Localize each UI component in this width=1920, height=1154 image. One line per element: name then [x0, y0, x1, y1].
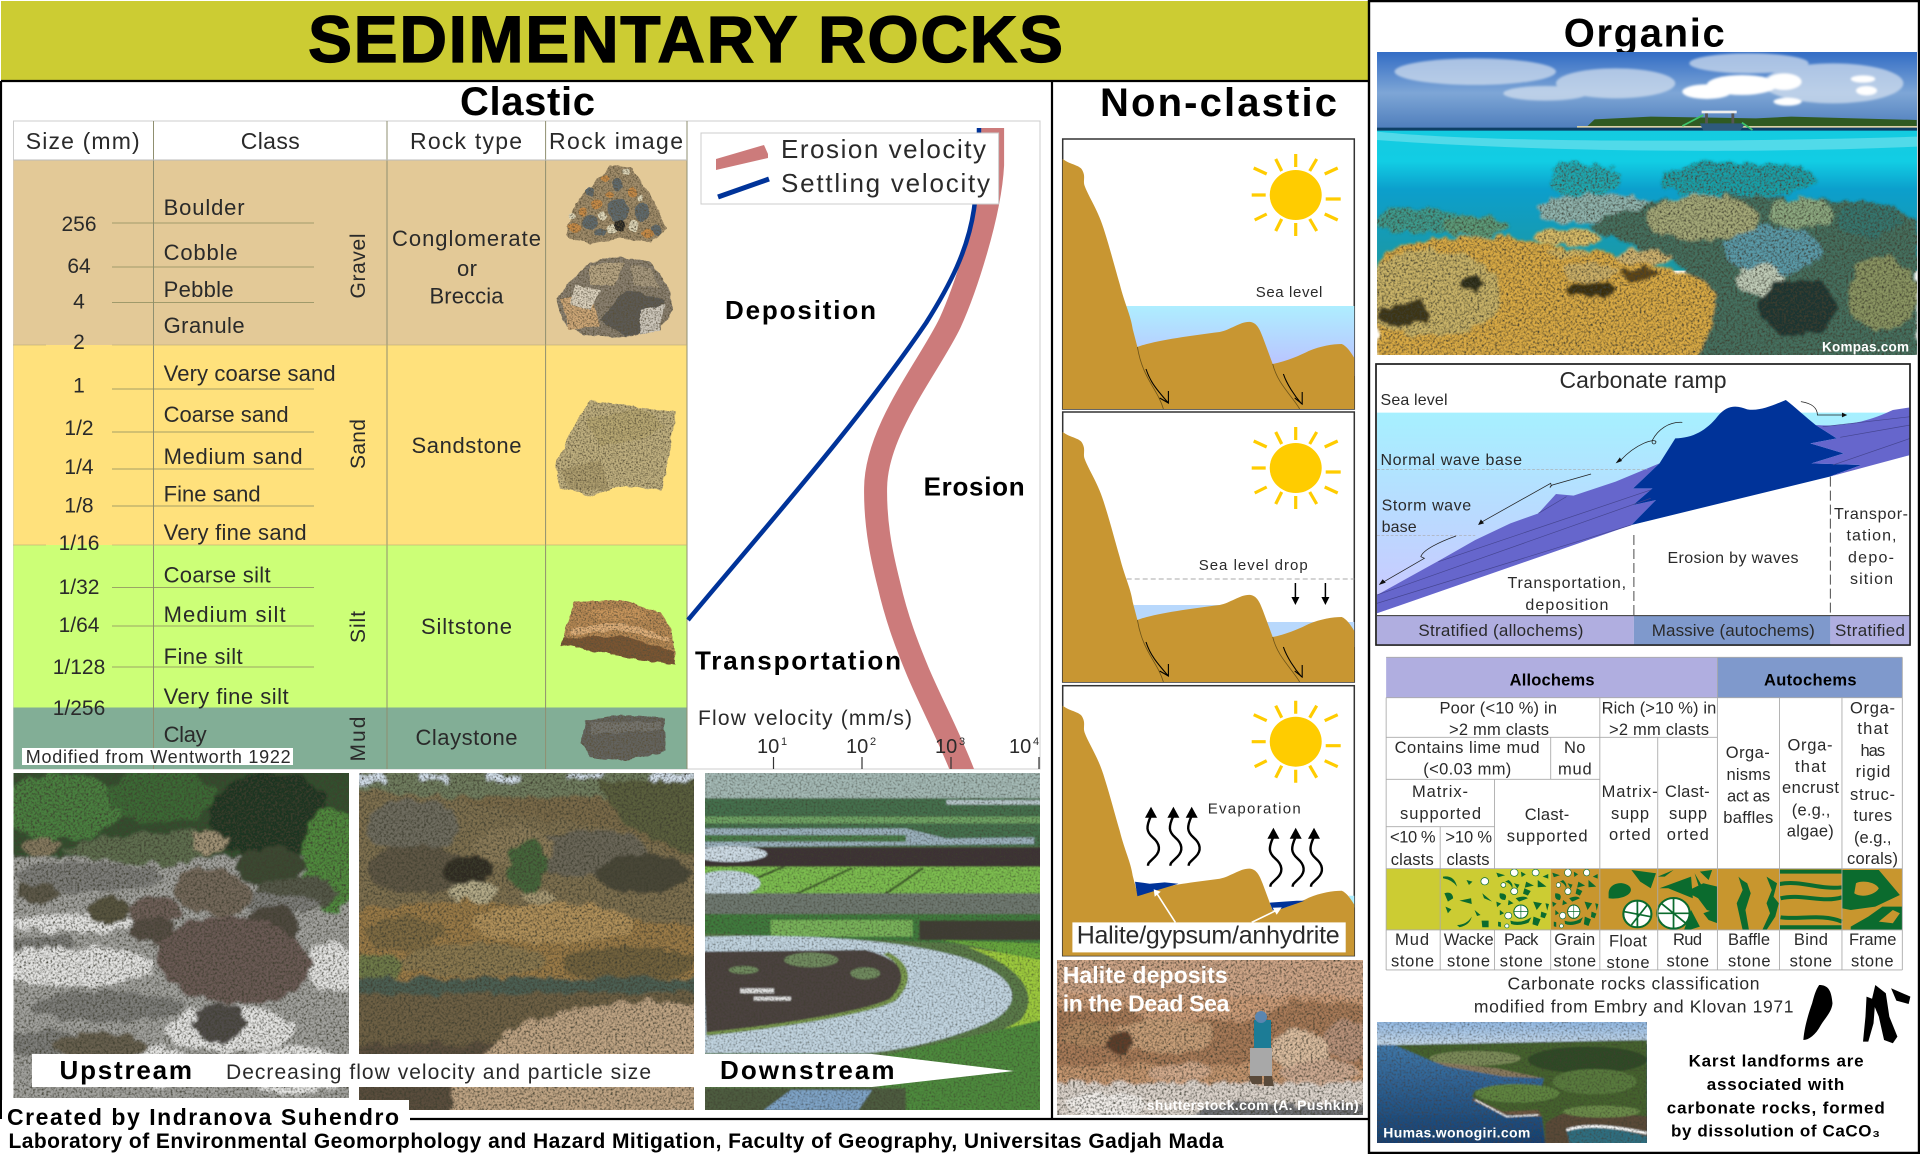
ramp water: [1377, 413, 1910, 613]
rock type labels: or: [457, 256, 477, 281]
rock names: Wacke: [1444, 931, 1494, 949]
ramp labels: Transpor-: [1834, 506, 1908, 523]
photo: karst coast: [1375, 1020, 1649, 1145]
size labels: 4: [73, 290, 85, 314]
table header: Rock type: [410, 128, 522, 154]
rock names: stone: [1851, 953, 1894, 971]
legend: Settling velocity: [781, 168, 990, 198]
class labels: Medium sand: [164, 444, 303, 469]
heading: clastic: Clastic: [460, 80, 595, 124]
grade labels rotated: [347, 234, 370, 762]
photo: coral reef: Kompas.com: [1822, 340, 1909, 355]
diagram: evaporation: [1063, 686, 1354, 956]
diagram: sea level: Sea level: [1256, 284, 1322, 301]
ramp labels: Transportation,: [1508, 575, 1626, 592]
bafflestone organisms: [1737, 877, 1779, 930]
diagram: sea level: [1063, 139, 1354, 409]
velocity axis: 10: [846, 736, 868, 758]
title banner: [1, 1, 1368, 80]
ramp labels: Erosion by waves: [1668, 550, 1798, 567]
process labels: Erosion: [924, 472, 1025, 502]
classification criteria: supported: [1507, 828, 1588, 846]
arrow: upstream to downstream: Downstream: [720, 1055, 894, 1085]
classification criteria: [1390, 699, 1898, 869]
floatstone grains: [1609, 870, 1656, 899]
rock names: stone: [1728, 953, 1770, 971]
classification criteria: Rich (>10 %) in: [1602, 699, 1716, 717]
rock names: stone: [1500, 953, 1543, 971]
rock image: siltstone: [560, 600, 676, 665]
rock names: Float: [1609, 933, 1647, 951]
class labels: Boulder: [164, 195, 245, 220]
class labels: Cobble: [164, 240, 238, 265]
classification criteria: orted: [1609, 826, 1651, 844]
rock type labels: Conglomerate: [392, 226, 541, 251]
ramp labels: depo-: [1848, 550, 1894, 567]
rock type labels: Siltstone: [421, 614, 512, 639]
size labels: 1/32: [59, 576, 99, 599]
rock type labels: Breccia: [430, 284, 504, 308]
velocity axis: 3: [959, 736, 965, 748]
rock names: Bind: [1794, 931, 1828, 949]
photo: dead sea halite: shutterstock.com (A. Pushkin): [1147, 1097, 1359, 1113]
classification criteria: Matrix-: [1602, 783, 1658, 801]
classification criteria: struc-: [1850, 786, 1895, 804]
wackestone grains: [1443, 876, 1492, 927]
size labels: 1/4: [64, 456, 94, 479]
karst note: by dissolution of CaCO₃: [1671, 1122, 1880, 1141]
classification criteria: Poor (<10 %) in: [1440, 699, 1557, 717]
velocity axis: 10: [935, 736, 957, 758]
ramp labels: Carbonate ramp: [1560, 367, 1726, 393]
karst note: carbonate rocks, formed: [1667, 1098, 1885, 1117]
table header: Size (mm): [26, 128, 140, 154]
size labels: 2: [73, 331, 85, 354]
rock image: conglomerate: [566, 165, 667, 244]
ramp labels: Normal wave base: [1380, 452, 1522, 469]
karst note: [1667, 1052, 1885, 1141]
size labels: 1: [73, 374, 85, 398]
rock type labels: Sandstone: [412, 433, 522, 458]
classification criteria: supp: [1611, 805, 1649, 823]
credits: [2, 1100, 1224, 1153]
caption: halite deposits: Halite deposits: [1063, 962, 1228, 988]
classification criteria: >10 %: [1445, 829, 1492, 847]
classification criteria: Orga-: [1850, 699, 1895, 717]
classification headers: Autochems: [1764, 672, 1857, 690]
arrow: upstream to downstream: Decreasing flow velocity and particle size: [226, 1061, 651, 1084]
grade labels rotated: Mud: [347, 716, 370, 762]
table header: Rock image: [549, 128, 683, 154]
heading: organic: Organic: [1564, 12, 1725, 56]
classification criteria: >2 mm clasts: [1609, 721, 1709, 739]
classification criteria: Clast-: [1525, 806, 1569, 824]
classification headers: [1510, 672, 1857, 690]
velocity axis: 4: [1033, 736, 1039, 748]
panel: clastic: [0, 80, 1048, 1113]
size labels: 256: [61, 213, 97, 236]
classification criteria: corals): [1847, 850, 1898, 868]
classification criteria: Contains lime mud: [1395, 739, 1540, 757]
grade labels rotated: Gravel: [347, 234, 370, 298]
ramp labels: Stratified: [1835, 621, 1905, 640]
photo: dead sea halite: [1057, 960, 1363, 1115]
credits: Created by Indranova Suhendro: [7, 1104, 399, 1130]
velocity axis: 10: [757, 736, 779, 758]
velocity axis: Flow velocity (mm/s): [698, 707, 912, 730]
legend: Erosion velocity: [781, 134, 986, 164]
table header bands: [1386, 657, 1717, 698]
classification criteria: that: [1857, 720, 1889, 738]
rock names: Grain: [1554, 931, 1595, 949]
size labels: 1/256: [53, 697, 105, 720]
classification criteria: rigid: [1856, 763, 1890, 781]
rock names: stone: [1666, 953, 1709, 971]
class labels: Fine silt: [164, 644, 243, 669]
class labels: Granule: [164, 313, 245, 338]
velocity axis: [698, 707, 1039, 769]
classification criteria: tures: [1854, 807, 1892, 825]
classification criteria: supp: [1669, 805, 1707, 823]
class labels: Clay: [164, 722, 207, 747]
classification criteria: (e.g.,: [1854, 829, 1892, 847]
source note: Modified from Wentworth 1922: [26, 747, 291, 767]
photo: downstream meander: [693, 770, 1048, 1113]
rock names: stone: [1790, 953, 1832, 971]
rock names: [1391, 931, 1896, 972]
bindstone organisms: [1780, 872, 1842, 927]
classification caption: modified from Embry and Klovan 1971: [1474, 997, 1794, 1017]
classification criteria: clasts: [1446, 851, 1490, 869]
photo: karst coast: Humas.wonogiri.com: [1383, 1124, 1530, 1140]
class labels: Fine sand: [164, 482, 261, 506]
rock image: claystone: [581, 715, 666, 761]
ramp labels: base: [1382, 519, 1417, 536]
erosion velocity curve: [876, 128, 993, 775]
ramp labels: Sea level: [1380, 392, 1448, 409]
arrow: upstream to downstream: Upstream: [60, 1055, 192, 1085]
panel: organic: [1359, 12, 1917, 1145]
size labels: 64: [67, 255, 91, 278]
ramp labels: Storm wave: [1382, 498, 1471, 515]
panel: non-clastic: [1050, 81, 1375, 1120]
settling velocity curve: [688, 128, 979, 620]
title banner: SEDIMENTARY ROCKS: [308, 2, 1063, 76]
class labels: Pebble: [164, 277, 234, 302]
classification criteria: clasts: [1391, 851, 1434, 869]
class labels: Coarse sand: [164, 402, 289, 427]
size labels: 1/64: [59, 614, 100, 637]
classification criteria: act as: [1727, 788, 1770, 806]
credits: Laboratory of Environmental Geomorphology and Hazard Mitigation, Faculty of Geography, Universitas Gadjah Mada: [8, 1130, 1224, 1153]
class labels: Coarse silt: [164, 562, 271, 588]
ramp labels: sition: [1850, 571, 1893, 588]
class labels: Very fine silt: [164, 684, 289, 709]
rock names: Frame: [1849, 931, 1896, 949]
class labels: [164, 195, 336, 747]
facies bar: [1377, 616, 1634, 645]
ramp labels: Stratified (allochems): [1418, 621, 1583, 640]
rudstone grains: [1658, 870, 1717, 930]
velocity axis: 1: [781, 736, 787, 748]
process labels: Deposition: [725, 295, 876, 325]
grade labels rotated: Sand: [347, 419, 370, 469]
stratified allochem wedge: [1377, 463, 1659, 613]
caption: halite deposits: [1064, 966, 1230, 1012]
classification criteria: Clast-: [1665, 783, 1710, 801]
diagram: carbonate ramp: [1376, 364, 1910, 645]
table header: Class: [241, 128, 300, 154]
size labels: 1/8: [64, 494, 94, 518]
classification criteria: supported: [1400, 805, 1481, 823]
classification criteria: (e.g.,: [1792, 802, 1830, 820]
size labels: 1/2: [64, 417, 94, 440]
classification criteria: encrust: [1782, 779, 1839, 797]
stratified right wedge: [1810, 407, 1910, 477]
rock names: Baffle: [1728, 931, 1770, 949]
classification headers: Allochems: [1510, 672, 1595, 690]
rock type labels: Claystone: [416, 725, 518, 750]
rock names: Pack: [1504, 931, 1539, 949]
rock image: breccia: [556, 256, 673, 338]
photo: midstream outcrop: [352, 767, 710, 1113]
classification criteria: mud: [1558, 761, 1592, 779]
rock names: Rud: [1673, 931, 1702, 949]
rock names: stone: [1606, 954, 1650, 972]
boat: [1682, 111, 1752, 131]
legend: [701, 133, 999, 204]
classification criteria: Orga-: [1726, 744, 1770, 762]
classification criteria: orted: [1667, 826, 1709, 844]
texture row: [1386, 869, 1902, 930]
framestone organisms: [1842, 870, 1902, 930]
grade labels rotated: Silt: [347, 611, 370, 643]
rock image: sandstone: [555, 400, 676, 496]
classification caption: Carbonate rocks classification: [1508, 973, 1760, 993]
rock names: stone: [1554, 953, 1596, 971]
class labels: Very coarse sand: [164, 361, 336, 386]
classification criteria: <10 %: [1390, 829, 1436, 847]
diagram: sea level drop: [1063, 412, 1354, 682]
classification criteria: Matrix-: [1412, 783, 1468, 801]
table: carbonate classification: [1386, 657, 1902, 972]
karst note: Karst landforms are: [1689, 1052, 1864, 1071]
classification criteria: Orga-: [1788, 737, 1832, 755]
size labels: 1/128: [53, 656, 105, 679]
rock names: stone: [1447, 953, 1490, 971]
rock names: Mud: [1395, 931, 1429, 949]
caption: halite deposits: in the Dead Sea: [1063, 991, 1230, 1017]
size labels: [53, 213, 105, 720]
classification criteria: >2 mm clasts: [1449, 721, 1549, 739]
photo: coral reef: [1359, 50, 1917, 360]
ramp labels: [1380, 367, 1908, 640]
chart: flow velocity curves: [688, 128, 1039, 775]
grid lines: [1386, 657, 1902, 970]
classification criteria: that: [1795, 758, 1826, 776]
process labels: [695, 295, 1025, 676]
grain size table: [13, 121, 1040, 769]
diagram: evaporation: Halite/gypsum/anhydrite: [1077, 921, 1340, 949]
size labels: 1/16: [59, 532, 99, 555]
class labels: Medium silt: [164, 602, 286, 627]
velocity axis: 2: [870, 736, 876, 748]
ramp labels: Massive (autochems): [1652, 621, 1815, 640]
arrow: upstream to downstream: [32, 1054, 1014, 1087]
table header: [26, 128, 683, 154]
classification criteria: baffles: [1723, 809, 1773, 827]
rock names: stone: [1391, 953, 1434, 971]
velocity axis: 10: [1009, 736, 1031, 758]
classification criteria: nisms: [1726, 766, 1770, 784]
ramp labels: tation,: [1846, 528, 1896, 545]
process labels: Transportation: [695, 646, 901, 676]
classification criteria: (<0.03 mm): [1423, 761, 1511, 779]
icon: karst silhouettes: [1803, 985, 1910, 1043]
classification caption: [1474, 973, 1794, 1017]
diagram: sea level drop: Sea level drop: [1199, 557, 1308, 574]
rock type labels: [392, 226, 541, 750]
diagram: evaporation: Evaporation: [1208, 801, 1301, 818]
massive autochem reef: [1631, 400, 1861, 525]
classification criteria: has: [1860, 742, 1885, 760]
karst note: associated with: [1707, 1075, 1844, 1094]
heading: non-clastic: Non-clastic: [1100, 81, 1337, 125]
ramp labels: deposition: [1525, 597, 1608, 614]
classification criteria: algae): [1787, 823, 1834, 841]
classification criteria: No: [1564, 739, 1585, 757]
photo: upstream river: [14, 773, 349, 1098]
class labels: Very fine sand: [164, 520, 307, 545]
